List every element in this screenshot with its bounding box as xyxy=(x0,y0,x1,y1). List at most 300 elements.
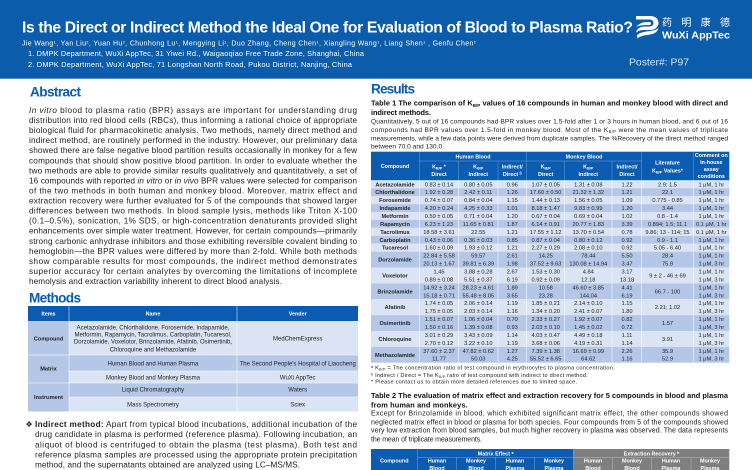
row: matrix: Matrix xyxy=(40,366,58,372)
row: Tacrolimus: 17.55 ± 1.12 xyxy=(530,230,561,236)
table 1 header: K xyxy=(652,168,656,174)
row: Methazolamide: 4.25 xyxy=(507,357,518,363)
row: instrument: Instrument xyxy=(34,395,63,401)
row: Forosemide: 0.84 ± 0.04 xyxy=(464,198,493,204)
row: Tacrolimus: 0.78 xyxy=(621,230,633,236)
abstract text: compounds that should show positive blood partition. In order to evaluate whether the xyxy=(29,156,357,165)
row: Tucaresol: Tucaresol xyxy=(382,246,408,252)
row: Rapamycin xyxy=(380,222,727,228)
row: Brinzolamide: 55.48 ± 8.05 xyxy=(463,293,494,299)
row: Voxelotor: 1.45 xyxy=(433,270,445,276)
row: Tucaresol: 1.60 ± 0.09 xyxy=(425,246,453,252)
table 1 header: Values* xyxy=(662,168,684,174)
table 1 description: between 70.0 and 130.0. xyxy=(371,144,444,151)
row: compound: Acetazolamide, Chlorthalidone, Forosemide, Indapamide, xyxy=(77,325,230,331)
abstract text: strong carbonic anhydrase inhibitors and those exhibiting reversible covalent binding to xyxy=(29,237,357,246)
table 1 title: Table 1 The comparison of K xyxy=(371,98,473,107)
row: Dorzolamide: 39.81 ± 6.39 xyxy=(463,262,494,268)
table 1 header: conditions xyxy=(698,174,725,180)
authors: 1 xyxy=(54,39,57,44)
row: Indapamide xyxy=(379,206,724,212)
table 2 header labels: Extraction Recovery ᵇ xyxy=(624,451,679,457)
table header row: Name xyxy=(146,312,160,318)
row: instrument: Liquid Chromatography xyxy=(122,388,184,394)
row: Dorzolamide: 28.4 xyxy=(662,254,673,260)
row: Tucaresol: 1.93 ± 0.12 xyxy=(464,246,493,252)
row: Chloroquine: 4.19 ± 0.31 xyxy=(574,341,603,347)
text block: indirect method xyxy=(35,420,357,470)
row: Dorzolamide: 22.84 ± 5.58 xyxy=(423,254,455,260)
row: Metformin: 0.8 - 1.4 xyxy=(657,214,678,220)
authors: 1 xyxy=(377,39,380,44)
row: Chlorthalidone: Chlorthalidone xyxy=(375,190,415,196)
table 1 title: indirect methods. xyxy=(371,108,431,117)
abstract text: hemolysis and extraction variability inherent to direct blood analysis. xyxy=(29,277,282,286)
table 1 title xyxy=(371,98,728,117)
row: Tucaresol: 0.92 xyxy=(621,246,633,252)
row: Afatinib: 1.80 xyxy=(621,309,633,315)
table 2 header labels: Human xyxy=(506,459,524,465)
row: Voxelotor: 12.18 xyxy=(581,277,595,283)
row: Metformin: 1.20 xyxy=(507,214,518,220)
authors: 2 xyxy=(123,39,126,44)
row: Acetazolamide: 1.31 ± 0.08 xyxy=(574,182,603,188)
table 1 header: Direct ᵇ xyxy=(503,172,522,178)
row: Voxelotor: 9 ± 2 - 46 ± 69 xyxy=(649,274,686,280)
table 1 header: K xyxy=(473,164,477,170)
row: Osimertinib xyxy=(379,317,724,331)
table 1 header: Literature xyxy=(655,161,680,167)
row: Brinzolamide: 23.28 xyxy=(539,293,553,299)
row: Methazolamide: 1 μM, 1 hr xyxy=(698,349,724,355)
row: Forosemide: 0.775 - 0.85 xyxy=(652,198,683,204)
table 1 header: Indirect xyxy=(469,172,488,178)
row: Osimertinib: 1 μM, 3 hr xyxy=(698,325,724,331)
row: Metformin: 0.59 ± 0.05 xyxy=(425,214,453,220)
row: Chloroquine: 3.68 ± 0.06 xyxy=(531,341,560,347)
row: compound: MedChemExpress xyxy=(273,336,322,342)
authors: , Chunhong Lu xyxy=(125,40,175,47)
row: Metformin xyxy=(381,214,724,220)
row: Rapamycin: 0.1 μM, 1 hr xyxy=(696,222,727,228)
row: Brinzolamide: 4.41 xyxy=(621,285,633,291)
table 2 description: neglected matrix effect in blood or plasma for both species. Four compounds from 5 of the compounds showed xyxy=(371,419,728,426)
row: compound: Compound xyxy=(34,336,64,342)
table 2 title: from human and monkeys. xyxy=(371,400,468,409)
row: Tacrolimus: 0.1 μM, 1 hr xyxy=(696,230,727,236)
row: Chloroquine: 3.43 ± 0.09 xyxy=(464,333,493,339)
text block: indirect method: method, and the supernatants obtained are analyzed using LC–MS/MS. xyxy=(35,461,300,470)
row: Tacrolimus: 1.21 xyxy=(507,230,518,236)
row: Afatinib: 1 μM, 3 hr xyxy=(698,309,724,315)
table 1 header: B/P xyxy=(544,166,551,170)
abstract text: hemoglobin—the BPR values were differed by more than 2-fold. While both methods xyxy=(29,247,357,256)
table 1 description: B/P xyxy=(609,129,616,134)
row: Forosemide: 1.09 xyxy=(621,198,633,204)
abstract text: two methods are able to provide similar results qualitatively and quantitatively, a set of xyxy=(29,166,358,175)
authors: , Duo Zhang, Cheng Chen xyxy=(227,40,316,47)
row: instrument: Mass Spectrometry xyxy=(127,402,179,408)
row: Voxelotor: 5.51 ± 0.37 xyxy=(464,277,493,283)
abstract text: enhancements over simple water treatment. However, for certain compounds—primarily xyxy=(29,227,358,236)
logo chinese name: 药 明 康 德 xyxy=(662,16,730,29)
row: Voxelotor: 0.92 ± 0.09 xyxy=(531,277,560,283)
row: Acetazolamide: 0.96 xyxy=(507,182,518,188)
table 2 header labels: Human xyxy=(662,459,680,465)
row: Brinzolamide: 1.89 xyxy=(507,285,518,291)
table 1 footnotes: ᵃ K xyxy=(371,366,379,372)
table 1 description: were the mean values of triplicate xyxy=(616,127,728,134)
row: Carboplatin: 1 μM, 1 hr xyxy=(698,238,724,244)
table 1 footnotes: = The concentration ratio of test compound in erythrocytes to plasma concentration. xyxy=(386,366,615,372)
row: Brinzolamide: Brinzolamide xyxy=(377,289,413,295)
row: Osimertinib: 1.45 ± 0.02 xyxy=(574,325,603,331)
row: Afatinib xyxy=(385,301,724,315)
row: Dorzolamide: 75.9 xyxy=(662,262,673,268)
abstract text: of the two methods in both human and monkey blood. Moreover, matrix effect and xyxy=(29,186,357,196)
row: Voxelotor: 1.53 ± 0.30 xyxy=(531,270,560,276)
row: Tucaresol xyxy=(382,246,724,252)
row: Voxelotor: 13.18 xyxy=(620,277,634,283)
row: Afatinib: 2.41 ± 0.07 xyxy=(574,309,603,315)
row: Methazolamide: 37.60 ± 2.37 xyxy=(423,349,455,355)
row: Indapamide: 4.20 ± 0.24 xyxy=(425,206,453,212)
abstract text: distribution into red blood cells (RBCs), thus informing a rational choice of appropriate xyxy=(29,116,357,125)
table 1: BPR comparison xyxy=(371,152,729,363)
row: Voxelotor: 0.89 ± 0.08 xyxy=(425,277,453,283)
row: Acetazolamide: 0.83 ± 0.14 xyxy=(425,182,453,188)
row: Metformin: Metformin xyxy=(381,214,409,220)
row: Metformin: 0.67 ± 0.04 xyxy=(531,214,560,220)
table header row: Items xyxy=(41,312,56,318)
row: Indapamide: 1.01 xyxy=(507,206,518,212)
title: Is the Direct or Indirect Method the Ideal One for Evaluation of Blood to Plasma Ratio? xyxy=(22,20,633,36)
heading: results: Results xyxy=(371,82,415,97)
row: Chlorthalidone: 21.32 ± 1.32 xyxy=(573,190,604,196)
row: Brinzolamide: 14.92 ± 3.24 xyxy=(423,285,455,291)
row: Afatinib: Afatinib xyxy=(385,305,406,311)
abstract text: In vitro blood to plasma ratio (BPR) assays are important for understanding drug xyxy=(29,106,357,115)
authors: 1 xyxy=(474,39,477,44)
row: Afatinib: 1.75 ± 0.05 xyxy=(425,309,453,315)
row: Voxelotor: 2.67 xyxy=(507,270,518,276)
table 1 title: values of 16 compounds in human and monkey blood with direct and xyxy=(480,98,728,107)
row: Chlorthalidone: 1.92 ± 0.28 xyxy=(425,190,453,196)
row: Voxelotor: 1 μM, 3 hr xyxy=(698,277,724,283)
row: Brinzolamide: 10.58 xyxy=(539,285,553,291)
row: Methazolamide: 64.62 xyxy=(581,357,595,363)
row: Chloroquine: 1.19 xyxy=(507,341,518,347)
row: Dorzolamide: 20.13 ± 1.67 xyxy=(423,262,455,268)
poster number: Poster#: P97 xyxy=(629,58,689,68)
row: Osimertinib: 1.92 ± 0.07 xyxy=(574,317,603,323)
row: Methazolamide: 1 μM, 3 hr xyxy=(698,357,724,363)
row: Metformin: 0.69 ± 0.04 xyxy=(574,214,603,220)
row: Dorzolamide: 1 μM, 3 hr xyxy=(698,262,724,268)
abstract text: biological fluid for pharmacokinetic analysis. Two methods, namely direct method and xyxy=(29,126,357,135)
row: Rapamycin: 0.894; 1.5; 11.1 xyxy=(648,222,687,228)
row: instrument: Sciex xyxy=(290,402,305,408)
table 2 header labels: Monkey xyxy=(700,459,720,465)
table 2 header labels xyxy=(380,451,720,470)
row: Carboplatin: 0.36 ± 0.03 xyxy=(464,238,493,244)
row: Tacrolimus: 18.58 ± 3.61 xyxy=(423,230,455,236)
row: Brinzolamide: 66.7 - 100 xyxy=(655,289,680,295)
table 1 header xyxy=(371,152,729,180)
row: Brinzolamide xyxy=(377,285,724,299)
row: Forosemide: 0.74 ± 0.07 xyxy=(425,198,453,204)
table 1 header: Human Blood xyxy=(455,154,491,160)
row: Forosemide: 1.56 ± 0.05 xyxy=(574,198,603,204)
row: Indapamide: Indapamide xyxy=(379,206,411,212)
row: Methazolamide: 55.52 ± 6.65 xyxy=(530,357,561,363)
table 1 header: Monkey Blood xyxy=(566,154,602,160)
row: Methazolamide: 1.16 xyxy=(621,357,633,363)
row: Dorzolamide: 14.25 xyxy=(539,254,553,260)
row: Methazolamide xyxy=(375,349,724,363)
row: compound: Dorzolamide, Voxelotor, Brinzolamide, Afatinib, Osimertinib, xyxy=(74,340,232,346)
row: Tucaresol: 1.21 xyxy=(507,246,518,252)
table 2 title xyxy=(371,391,729,409)
row: Dorzolamide: Dorzolamide xyxy=(378,258,412,264)
table 2: matrix effect and recovery xyxy=(371,449,729,470)
row: Osimertinib: 1.06 ± 0.04 xyxy=(464,317,493,323)
row: Indapamide: 3.44 xyxy=(662,206,673,212)
abstract text: superior accuracy for certain analytes by overcoming the limitations of incomplete xyxy=(29,267,357,276)
authors: , Xiangling Wang xyxy=(319,40,377,47)
row: Chloroquine: 4.03 ± 0.47 xyxy=(531,333,560,339)
row: Osimertinib: Osimertinib xyxy=(379,321,411,327)
abstract text: extraction recovery were further evaluated for 5 of the compounds that showed larger xyxy=(29,196,357,206)
row: Chloroquine: 1.14 xyxy=(507,333,518,339)
table 1 header: K xyxy=(583,164,587,170)
row: Afatinib: 2.03 ± 0.14 xyxy=(464,309,493,315)
table header row xyxy=(41,312,308,318)
row: Metformin: 1 μM, 1 hr xyxy=(698,214,724,220)
row: Chloroquine: 3.91 xyxy=(662,337,673,343)
row: Carboplatin: 0.80 ± 0.12 xyxy=(574,238,603,244)
row: Afatinib: 1.19 xyxy=(507,301,518,307)
table 1 header: B/P xyxy=(477,166,484,170)
table 1 description: compounds had BPR values over 1.5-fold in monkey blood. Most of the K xyxy=(371,127,608,134)
row: Brinzolamide: 144.04 xyxy=(580,293,597,299)
row: Rapamycin: Rapamycin xyxy=(380,222,410,228)
row: Carboplatin: 0.43 ± 0.06 xyxy=(425,238,453,244)
row: Chlorthalidone: 22.1 xyxy=(662,190,673,196)
row: Metformin: 1.02 xyxy=(621,214,633,220)
row: Afatinib: 2.21; 1.02 xyxy=(655,305,680,311)
row: Acetazolamide xyxy=(375,182,724,188)
row: Tacrolimus: 13.70 ± 0.54 xyxy=(573,230,604,236)
row: Afatinib: 1.15 xyxy=(621,301,633,307)
abstract text: (0.1–0.5%), sonication, 1% SDS, or high-concentration denaturants provided slight xyxy=(29,217,358,226)
row: Brinzolamide: 3.65 xyxy=(507,293,518,299)
row: Chloroquine xyxy=(379,333,724,347)
row: Methazolamide: 35.9 xyxy=(662,349,673,355)
heading: methods: Methods xyxy=(29,291,81,306)
row: Tacrolimus: 9.86; 13 - 114; 15 xyxy=(645,230,690,236)
row: Acetazolamide: 1 μM, 1 hr xyxy=(698,182,724,188)
abstract text: differences between two methods. In blood sample lysis, methods like Triton X-100 xyxy=(29,207,357,216)
table 2 header labels: Monkey xyxy=(466,459,486,465)
table 1 header: Indirect/ xyxy=(617,164,638,170)
authors: , Yuan Hu xyxy=(89,40,122,47)
table 1 footnotes: B/P xyxy=(379,368,386,372)
row: Chloroquine: 4.49 ± 0.18 xyxy=(574,333,603,339)
row: Dorzolamide: 1.98 xyxy=(507,262,518,268)
row: Carboplatin: Carboplatin xyxy=(379,238,411,244)
row: Carboplatin: 0.85 xyxy=(507,238,518,244)
table 2 header labels: Compound xyxy=(380,458,409,464)
table 1 description xyxy=(371,118,728,151)
row: Tacrolimus xyxy=(380,230,727,236)
table 1 description: Quantitatively, 5 out of 16 compounds had BPR values over 1.5-fold after 1 or 3 hours in human blood, and 6 out of 16 xyxy=(371,118,728,125)
row: Voxelotor: 3.88 ± 0.28 xyxy=(464,270,493,276)
row: Rapamycin: 1.87 xyxy=(507,222,518,228)
abstract text: showed there are false negative blood partition results occasionally in monkey for a few xyxy=(29,146,357,155)
row: Osimertinib: 0.72 xyxy=(621,325,633,331)
row: Chloroquine: 1.14 xyxy=(621,341,633,347)
text block: indirect method: aliquot of blood is centrifuged to obtain the plasma (test plasma). Both test and xyxy=(35,440,357,449)
row: matrix: WuXi AppTec xyxy=(280,375,315,381)
row: Indapamide: 4.25 ± 0.33 xyxy=(464,206,493,212)
row: Afatinib: 1.85 ± 0.21 xyxy=(531,301,560,307)
authors: , Yan Liu xyxy=(56,40,86,47)
row: Indapamide: 9.83 ± 0.99 xyxy=(574,206,603,212)
affiliation 1: 1. DMPK Department, WuXi AppTec, 31 Yiwei Rd., Waigaoqiao Free Trade Zone, Shanghai, China xyxy=(28,49,365,58)
affiliation 2: 2. DMPK Department, WuXi AppTec, 71 Longshan North Road, Pukou District, Nanjing, China xyxy=(28,60,353,69)
authors: 2 xyxy=(86,39,89,44)
row: Voxelotor: 4.84 xyxy=(583,270,594,276)
row: matrix xyxy=(40,361,356,381)
row: Tucaresol: 5.05 - 6.40 xyxy=(654,246,681,252)
row: Methazolamide: 50.03 xyxy=(471,357,485,363)
row: Voxelotor: Voxelotor xyxy=(382,274,409,280)
logo wordmark: WuXi AppTec xyxy=(662,30,730,42)
row: matrix: The Second People's Hospital of Liaocheng xyxy=(240,361,356,367)
table 1 header: Compound xyxy=(381,164,409,170)
row: Osimertinib: 1.57 xyxy=(662,321,673,327)
table: materials xyxy=(28,306,358,412)
table 1 header: * xyxy=(442,164,447,170)
text block: indirect method: drug candidate in plasma is performed (reference plasma). Following incubation, an xyxy=(35,430,357,439)
row: Acetazolamide: 2.9; 1.5 xyxy=(658,182,677,188)
row: Methazolamide: 7.39 ± 1.38 xyxy=(531,349,560,355)
table 1 header: assay xyxy=(704,167,719,173)
row: Indapamide: 1 μM, 1 hr xyxy=(698,206,724,212)
row: Dorzolamide: 1 μM, 1 hr xyxy=(698,254,724,260)
row: Chlorthalidone xyxy=(375,190,724,196)
table 2 description xyxy=(371,411,728,443)
table 2 header labels: Human xyxy=(428,459,446,465)
table 1 footnotes: * Please contact us to obtain more detailed references due to limited space. xyxy=(371,380,577,386)
row: compound xyxy=(34,325,322,353)
row: Afatinib: 2.14 ± 0.10 xyxy=(574,301,603,307)
abstract text xyxy=(29,106,358,286)
row: Brinzolamide: 46.60 ± 3.85 xyxy=(573,285,604,291)
row: Tacrolimus: 22.55 xyxy=(471,230,485,236)
row: Rapamycin: 6.14 ± 0.91 xyxy=(531,222,560,228)
row: Osimertinib: 1.39 ± 0.08 xyxy=(464,325,493,331)
row: Voxelotor: 6.19 xyxy=(507,277,518,283)
row: Acetazolamide: 1.07 ± 0.05 xyxy=(531,182,560,188)
row: Chloroquine: 2.70 ± 0.12 xyxy=(425,341,453,347)
row: Chlorthalidone: 1 μM, 1 hr xyxy=(698,190,724,196)
row: Carboplatin: 0.9 - 1.1 xyxy=(657,238,678,244)
row: Rapamycin: 20.77 ± 1.83 xyxy=(573,222,604,228)
row: Afatinib: 1.16 xyxy=(507,309,518,315)
table 1 header: K xyxy=(541,164,544,170)
row: Brinzolamide: 1 μM, 3 hr xyxy=(698,293,724,299)
table 1 footnotes: ratio of test compound with indirect to direct method. xyxy=(445,373,588,379)
row: Forosemide: 1 μM, 1 hr xyxy=(698,198,724,204)
row: Dorzolamide: 78.44 xyxy=(581,254,595,260)
table 1 header: K xyxy=(432,164,436,170)
row: Methazolamide: 1.27 xyxy=(507,349,518,355)
authors: 1 xyxy=(316,39,319,44)
row: Forosemide: 1.44 ± 0.13 xyxy=(531,198,560,204)
table 2 header labels: Human xyxy=(584,459,602,465)
authors: 1 xyxy=(176,39,179,44)
row: Rapamycin: 6.23 ± 1.23 xyxy=(425,222,453,228)
table 1 description: measurements, while a few data points were derived from duplicate samples. The %Recovery of the direct method ranged xyxy=(371,135,728,142)
text block: indirect method: reference plasma samples are processed using the appropriate protein precipitation xyxy=(35,450,357,460)
authors: 1 xyxy=(423,39,426,44)
table 2 title: Table 2 The evaluation of matrix effect and extraction recovery for 5 compounds in blood and plasma xyxy=(371,391,729,400)
row: Rapamycin: 11.65 ± 0.81 xyxy=(463,222,494,228)
header banner xyxy=(0,0,752,79)
row: Methazolamide: 47.82 ± 0.62 xyxy=(463,349,494,355)
row: Chloroquine: Chloroquine xyxy=(379,337,411,343)
table 2 header labels: Monkey xyxy=(622,459,642,465)
row: Dorzolamide: 2.61 xyxy=(507,254,518,260)
table 1 header: Indirect xyxy=(579,172,598,178)
row: compound: Metformin, Rapamycin, Tacrolimus, Carboplatin, Tucaresol, xyxy=(75,333,232,339)
row: Voxelotor xyxy=(382,270,724,283)
row: Tucaresol: 2.08 ± 0.10 xyxy=(574,246,603,252)
icon: bullet diamond: ❖ xyxy=(26,420,33,429)
row: Acetazolamide: 0.80 ± 0.05 xyxy=(464,182,493,188)
abstract text: indirect method, are routinely performed in the industry. However, our preliminary data xyxy=(29,136,357,145)
table 1 header: Comment on xyxy=(695,153,728,159)
row: Voxelotor: 1 μM, 1 hr xyxy=(698,270,724,276)
table 1 header: Direct xyxy=(538,172,554,178)
table 1 header: B/P xyxy=(587,166,594,170)
row: Dorzolamide: 37.52 ± 9.63 xyxy=(530,262,561,268)
row: Osimertinib: 2.03 ± 0.10 xyxy=(531,325,560,331)
table 1 footnotes: ᵇ Indirect / Direct = The K xyxy=(371,373,439,379)
row: Tucaresol: 2.27 ± 0.29 xyxy=(531,246,560,252)
row: Osimertinib: 1 μM, 1 hr xyxy=(698,317,724,323)
text block: indirect method: Indirect method: Apart from typical blood incubations, additional incubation of the xyxy=(35,420,357,429)
table 1 header: Direct xyxy=(619,172,635,178)
row: Methazolamide: 52.9 xyxy=(662,357,673,363)
row: Acetazolamide: Acetazolamide xyxy=(375,182,415,188)
row: Metformin: 0.71 ± 0.04 xyxy=(464,214,493,220)
row: Tucaresol: 1 μM, 1 hr xyxy=(698,246,724,252)
table 1 header: B/P xyxy=(656,170,663,174)
table 2 header labels: Matrix Effect ᵃ xyxy=(478,451,514,457)
row: Carboplatin xyxy=(379,238,724,244)
row: Afatinib: 1.34 ± 0.20 xyxy=(531,309,560,315)
table 1 header: Direct xyxy=(431,172,447,178)
row: Osimertinib: 1.51 ± 0.07 xyxy=(425,317,453,323)
row: Methazolamide: Methazolamide xyxy=(375,353,415,359)
heading: abstract: Abstract xyxy=(30,85,81,100)
row: Osimertinib: 0.82 xyxy=(621,317,633,323)
row: Brinzolamide: 28.23 ± 4.61 xyxy=(463,285,494,291)
row: Carboplatin: 0.87 ± 0.04 xyxy=(531,238,560,244)
